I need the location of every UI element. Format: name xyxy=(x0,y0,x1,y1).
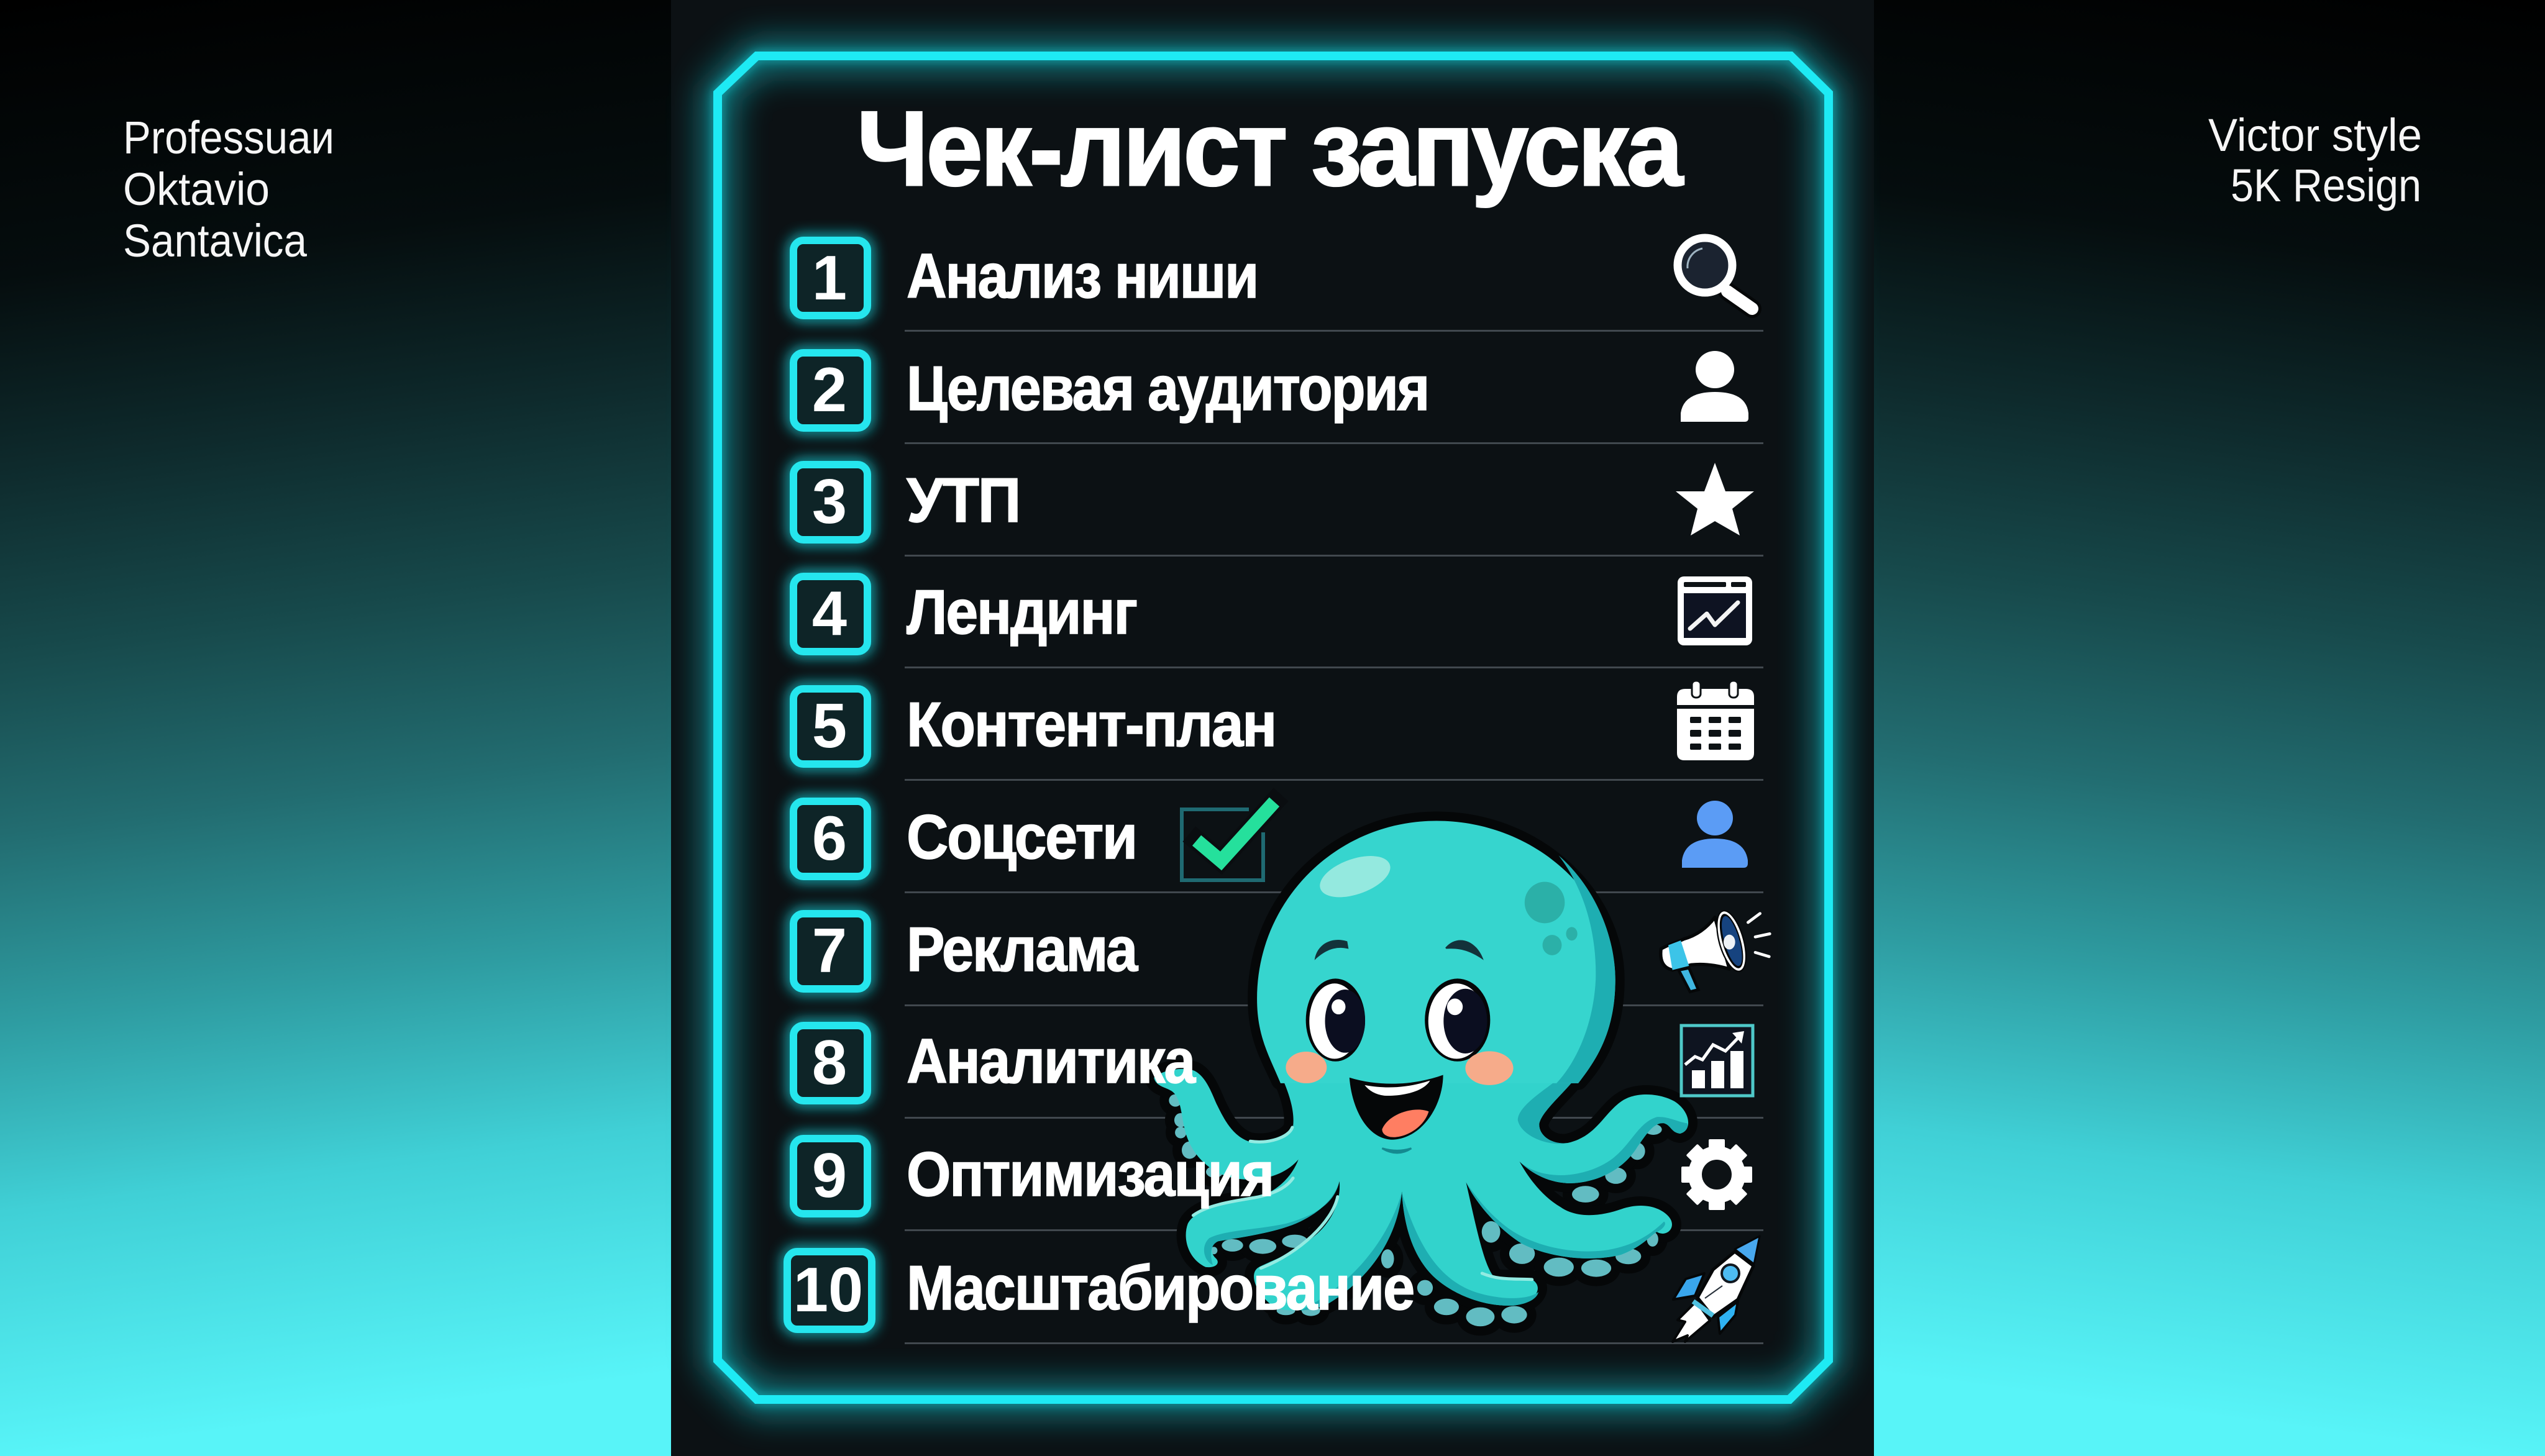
octopus arms xyxy=(1154,1069,1688,1326)
checklist item labels: Соцсети xyxy=(907,803,1136,872)
left caption: Professuaи xyxy=(123,112,334,163)
icon: gear xyxy=(1681,1139,1752,1210)
octopus mouth xyxy=(1350,1075,1443,1153)
number badges: 10 xyxy=(793,1255,863,1325)
number badges: 3 xyxy=(812,467,847,537)
number boxes glow xyxy=(787,240,872,1329)
central dark panel xyxy=(671,0,1874,1456)
octopus cheeks xyxy=(1286,1051,1514,1085)
checklist item labels: Лендинг xyxy=(907,578,1136,647)
octopus spots xyxy=(1525,882,1578,955)
octopus outline xyxy=(1154,821,1688,1326)
checklist item labels: Целевая аудитория xyxy=(907,354,1428,424)
octopus highlight xyxy=(1313,848,1397,906)
checklist item labels xyxy=(907,242,1428,1323)
number badges: 5 xyxy=(812,691,847,761)
icon: growth chart xyxy=(1681,1026,1753,1096)
icon: megaphone xyxy=(1661,907,1770,992)
number badges: 7 xyxy=(812,916,847,986)
right caption: Victor style xyxy=(2208,109,2422,161)
row divider lines xyxy=(905,330,1763,1344)
checklist item labels: Реклама xyxy=(907,915,1138,985)
icon: magnifier xyxy=(1678,238,1752,309)
octopus shading xyxy=(1556,855,1615,1083)
checklist item labels: Контент-план xyxy=(907,690,1276,760)
neon frame xyxy=(718,56,1829,1399)
right caption xyxy=(2208,109,2422,211)
icon: person xyxy=(1681,351,1748,422)
checklist item labels: Аналитика xyxy=(907,1027,1196,1096)
number badges: 6 xyxy=(812,804,847,873)
icon: star xyxy=(1676,463,1754,535)
left caption xyxy=(123,112,334,266)
number badges: 9 xyxy=(812,1141,847,1211)
octopus mascot xyxy=(1154,821,1688,1326)
checklist item labels: Масштабирование xyxy=(907,1254,1414,1323)
background: right gradient panel xyxy=(1873,0,2545,1456)
icon: checkbox with green check xyxy=(1182,802,1274,880)
checklist item labels: Оптимизация xyxy=(907,1140,1273,1209)
icon: calendar xyxy=(1677,681,1754,760)
number badges: 2 xyxy=(812,355,847,425)
checklist item labels: Анализ ниши xyxy=(907,242,1258,311)
left caption: Santavica xyxy=(123,215,308,266)
octopus eyes xyxy=(1306,978,1490,1062)
right caption: 5K Resign xyxy=(2231,160,2421,211)
octopus head xyxy=(1257,821,1615,1083)
background: left gradient panel xyxy=(0,0,672,1456)
checklist item labels: УТП xyxy=(907,466,1020,535)
icon: landing page window xyxy=(1678,576,1752,645)
left caption: Oktavio xyxy=(123,163,270,215)
number badges: 8 xyxy=(812,1028,847,1098)
number badges xyxy=(787,240,872,1329)
octopus eyebrows xyxy=(1315,940,1484,960)
number badges: 4 xyxy=(812,579,847,648)
title: Чек-лист запуска xyxy=(857,89,1684,208)
icon: blue person xyxy=(1682,801,1748,868)
icon: rocket xyxy=(1673,1236,1760,1342)
number badges: 1 xyxy=(812,243,847,313)
